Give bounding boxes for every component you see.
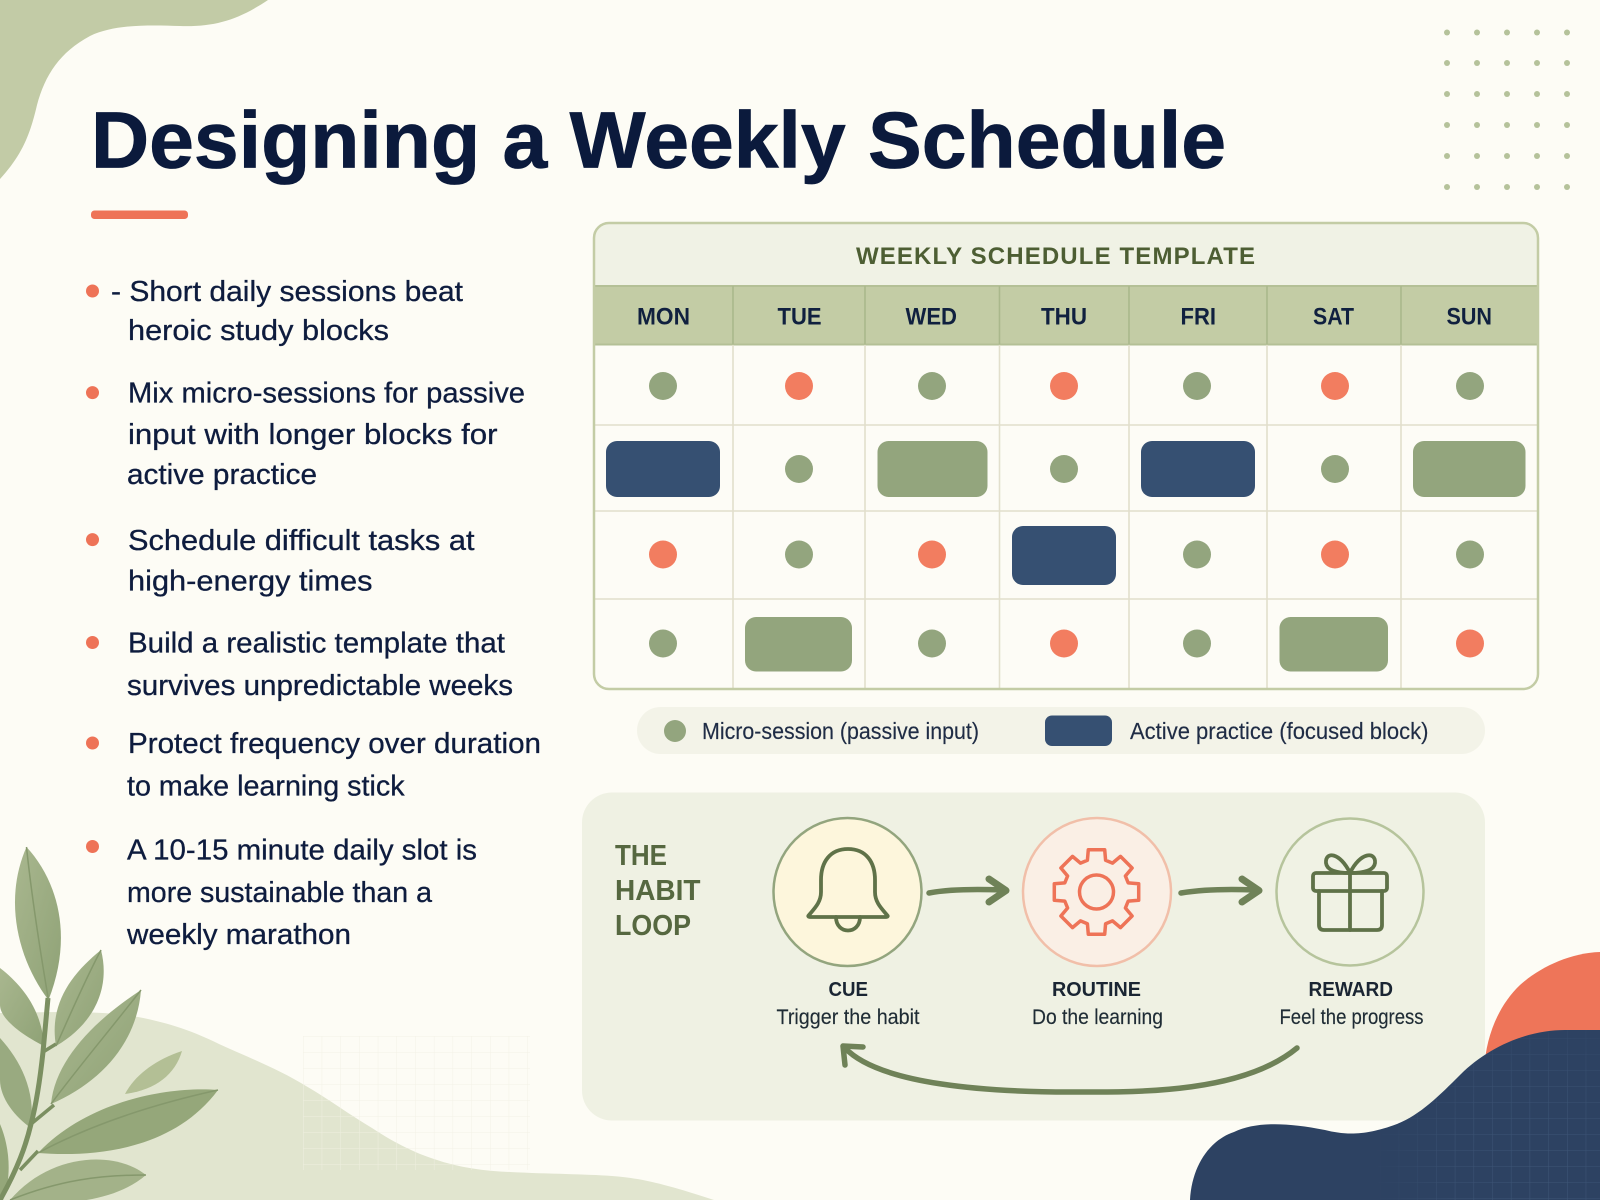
routine step: ROUTINE bbox=[1052, 979, 1141, 1001]
bullet 5 bbox=[86, 728, 541, 803]
bullet 1: - Short daily sessions beat bbox=[111, 276, 463, 308]
icon: gear bbox=[1054, 850, 1139, 934]
bullet 2: active practice bbox=[127, 459, 317, 491]
background blob: top left bbox=[0, 0, 268, 179]
decorative leaves bbox=[0, 847, 218, 1200]
panel: the habit loop bbox=[582, 792, 1485, 1120]
habit loop heading: LOOP bbox=[615, 910, 691, 942]
bullet 3: high-energy times bbox=[128, 566, 372, 598]
bullet 2 bbox=[86, 378, 525, 491]
legend: Micro-session (passive input) bbox=[702, 718, 979, 744]
arrow: cue to routine bbox=[929, 879, 1006, 902]
bullet 4 bbox=[86, 627, 513, 702]
day labels: FRI bbox=[1180, 304, 1216, 330]
habit loop heading: HABIT bbox=[615, 875, 701, 907]
bullet 4: Build a realistic template that bbox=[128, 627, 505, 659]
bullet list bbox=[86, 276, 541, 951]
icon: bell bbox=[808, 849, 888, 930]
legend bbox=[637, 707, 1485, 754]
reward step: Feel the progress bbox=[1280, 1006, 1424, 1029]
habit loop heading bbox=[615, 840, 701, 942]
bullet 6: A 10-15 minute daily slot is bbox=[127, 834, 477, 866]
day labels: MON bbox=[637, 304, 690, 330]
routine step: Do the learning bbox=[1032, 1006, 1163, 1029]
background hill: bottom left bbox=[0, 1012, 714, 1200]
reward step: REWARD bbox=[1308, 979, 1393, 1001]
bullet 3: Schedule difficult tasks at bbox=[128, 525, 474, 557]
schedule row 1 bbox=[649, 372, 1484, 400]
schedule row 3 bbox=[649, 526, 1484, 585]
bullet 6 bbox=[86, 834, 477, 951]
day labels: THU bbox=[1041, 304, 1087, 330]
panel: weekly schedule table bbox=[594, 223, 1538, 689]
bullet 6: more sustainable than a bbox=[127, 877, 433, 909]
day labels bbox=[637, 304, 1492, 330]
bullet 3 bbox=[86, 525, 474, 598]
bullet 4: survives unpredictable weeks bbox=[127, 670, 513, 702]
cue step bbox=[774, 818, 922, 1029]
habit loop heading: THE bbox=[615, 840, 667, 872]
table heading: WEEKLY SCHEDULE TEMPLATE bbox=[856, 243, 1255, 270]
icon: gift bbox=[1313, 855, 1387, 930]
arrow: reward back to cue bbox=[843, 1046, 1297, 1092]
title: Designing a Weekly Schedule bbox=[91, 96, 1226, 184]
day labels: WED bbox=[906, 304, 957, 330]
arrow: routine to reward bbox=[1181, 879, 1259, 902]
cue step: CUE bbox=[828, 979, 868, 1001]
day labels: SAT bbox=[1313, 304, 1354, 330]
bullet 5: Protect frequency over duration bbox=[128, 728, 541, 760]
background dot grid bbox=[1444, 30, 1570, 190]
bullet 6: weekly marathon bbox=[126, 919, 351, 951]
bullet 1 bbox=[86, 276, 463, 347]
bullet 2: Mix micro-sessions for passive bbox=[128, 378, 525, 410]
bullet 2: input with longer blocks for bbox=[128, 419, 498, 451]
legend: Active practice (focused block) bbox=[1130, 718, 1428, 744]
cue step: Trigger the habit bbox=[776, 1006, 920, 1029]
day labels: SUN bbox=[1446, 304, 1492, 330]
reward step bbox=[1276, 818, 1424, 1029]
background blobs: bottom right bbox=[1190, 952, 1600, 1200]
schedule row 2 bbox=[606, 441, 1526, 497]
schedule row 4 bbox=[649, 617, 1484, 672]
day labels: TUE bbox=[778, 304, 822, 330]
routine step bbox=[1023, 818, 1171, 1029]
title underline accent bbox=[91, 210, 188, 219]
bullet 1: heroic study blocks bbox=[128, 315, 389, 347]
bullet 5: to make learning stick bbox=[127, 771, 405, 803]
faint grid near hill bbox=[303, 1036, 530, 1170]
